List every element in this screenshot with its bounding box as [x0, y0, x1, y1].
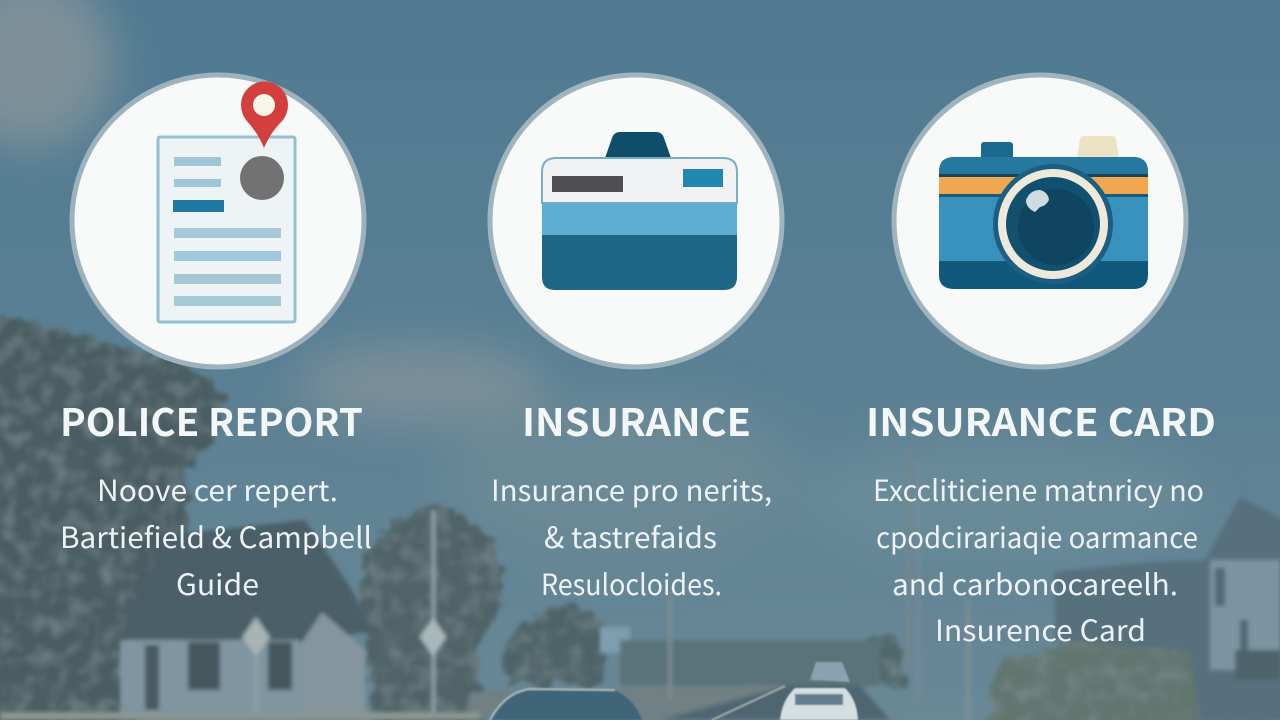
icon circle: insurance card — [894, 75, 1186, 367]
text: insurance card description: cpodcirariaqie oarmance — [876, 515, 1198, 557]
text: insurance card description: Insurence Card — [935, 608, 1146, 650]
heading: insurance: INSURANCE — [522, 392, 751, 447]
foliage group — [0, 312, 1280, 720]
utility poles — [906, 450, 911, 670]
text: police report description — [60, 468, 372, 604]
blue car — [490, 689, 642, 720]
icon circle: police report — [72, 75, 364, 367]
left house — [120, 520, 372, 645]
text: insurance description: & tastrefaids — [544, 515, 717, 557]
horizon and ground — [620, 640, 880, 686]
text: insurance description: Resulocloides. — [541, 562, 722, 604]
poles and signs — [431, 510, 436, 720]
right building — [1055, 497, 1280, 720]
panel: insurance card — [866, 75, 1216, 650]
icon: red map pin — [241, 81, 288, 148]
icon circle: insurance — [490, 75, 782, 367]
icon: insurance card with tab — [542, 132, 737, 290]
icon: report document — [158, 137, 295, 322]
text: police report description: Bartiefield & Campbell — [60, 515, 372, 557]
text: insurance description — [491, 468, 772, 604]
text: police report description: Guide — [176, 562, 259, 604]
text: insurance description: Insurance pro nerits, — [491, 468, 772, 510]
text: police report description: Noove cer repert. — [97, 468, 338, 510]
text: insurance card description: Exccliticiene matnricy no — [873, 468, 1204, 510]
panel: police report — [60, 75, 372, 604]
panel: insurance — [490, 75, 782, 604]
heading: insurance card: INSURANCE CARD — [866, 392, 1216, 447]
heading: police report: POLICE REPORT — [60, 392, 363, 447]
text: insurance card description: and carbonocareelh. — [892, 562, 1178, 604]
icon: camera — [939, 136, 1148, 289]
white car — [780, 688, 858, 720]
text: insurance card description — [873, 468, 1204, 650]
